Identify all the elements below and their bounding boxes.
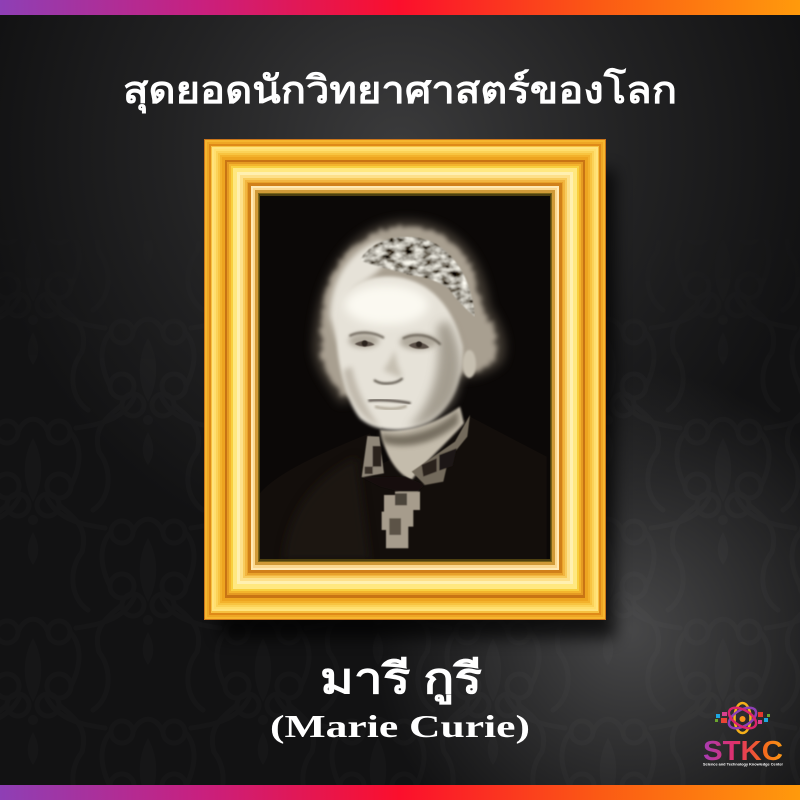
bright hair on the left	[330, 240, 388, 343]
hair glow	[313, 220, 505, 403]
bottom gradient bar	[0, 785, 800, 800]
hair silhouette	[321, 227, 497, 397]
nose	[374, 350, 403, 384]
logo wordmark: STKC	[703, 735, 783, 766]
ear	[463, 350, 476, 378]
dark coat	[278, 454, 374, 559]
gold picture frame	[204, 139, 606, 620]
STKC logo	[703, 703, 784, 766]
icon: atom	[726, 703, 759, 733]
name in English: (Marie Curie)	[270, 708, 530, 744]
eye socket shading	[349, 333, 437, 350]
portrait of Marie Curie	[278, 216, 510, 559]
frame shadow	[220, 170, 615, 638]
curled hair texture	[360, 237, 475, 317]
neck shadow	[380, 410, 458, 446]
icon: coloured dots	[715, 712, 770, 724]
top gradient bar	[0, 0, 800, 15]
cheek shading	[408, 320, 461, 428]
neck	[380, 407, 464, 480]
mouth	[368, 400, 411, 409]
face	[336, 277, 463, 430]
name in Thai: มารี กูรี	[320, 656, 483, 705]
plaid collar	[362, 415, 470, 548]
title: สุดยอดนักวิทยาศาสตร์ของโลก	[123, 67, 677, 114]
logo tagline: Science and Technology Knowledge Center	[703, 762, 784, 766]
eyes and brows	[349, 333, 441, 349]
jaw shading	[343, 367, 380, 427]
forehead highlight	[345, 285, 428, 325]
